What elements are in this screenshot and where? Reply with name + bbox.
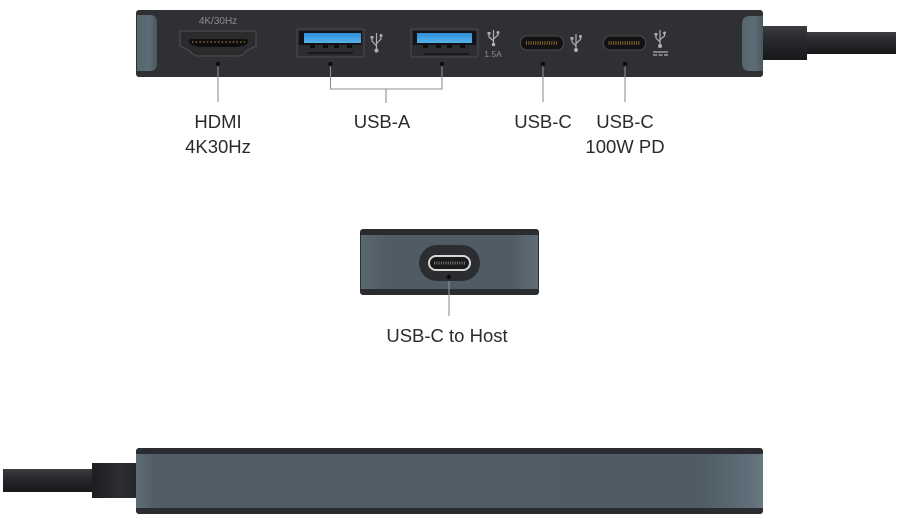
port: USB-A 1 <box>297 29 364 57</box>
callout: USB-A: USB-A <box>354 111 411 132</box>
hub body: side <box>136 448 763 514</box>
HDMI speed marking: 4K/30Hz <box>199 16 237 27</box>
end cap: right <box>742 16 763 71</box>
hub body: end <box>360 229 539 295</box>
icon: USB power delivery symbol <box>653 30 668 55</box>
cable: left side <box>3 463 137 498</box>
power marking 1.5A: 1.5A <box>484 49 502 59</box>
side face <box>136 454 763 508</box>
callout: USB-C 100W PD <box>585 62 665 157</box>
hub end view <box>360 229 539 295</box>
callout: USB-C to Host <box>386 275 508 346</box>
hub side view <box>3 448 763 514</box>
callout: HDMI: 4K30Hz <box>185 136 251 157</box>
cable: right side <box>762 26 896 60</box>
icon: USB symbol 3 <box>570 34 582 52</box>
port: USB-C to host <box>419 245 480 281</box>
callout: USB-C 100W PD: USB-C <box>596 111 654 132</box>
callout: HDMI: HDMI <box>194 111 242 132</box>
icon: USB symbol 1 <box>370 33 382 52</box>
icon: USB symbol 2 <box>488 30 500 46</box>
callout: USB-C 100W PD: 100W PD <box>585 136 665 157</box>
port: HDMI <box>180 31 256 56</box>
port: USB-C 1 <box>520 36 564 50</box>
hub body: front <box>136 10 763 77</box>
callout: USB-C <box>514 62 572 132</box>
end cap: left <box>137 15 157 71</box>
callout: USB-A <box>328 62 444 132</box>
callout: USB-C: USB-C <box>514 111 572 132</box>
port: USB-A 2 <box>411 29 478 57</box>
end face <box>361 235 538 289</box>
callout: HDMI <box>185 62 251 157</box>
hub front view with ports <box>136 10 896 77</box>
port: USB-C 2 <box>604 36 646 50</box>
callout: USB-C to Host: USB-C to Host <box>386 325 508 346</box>
